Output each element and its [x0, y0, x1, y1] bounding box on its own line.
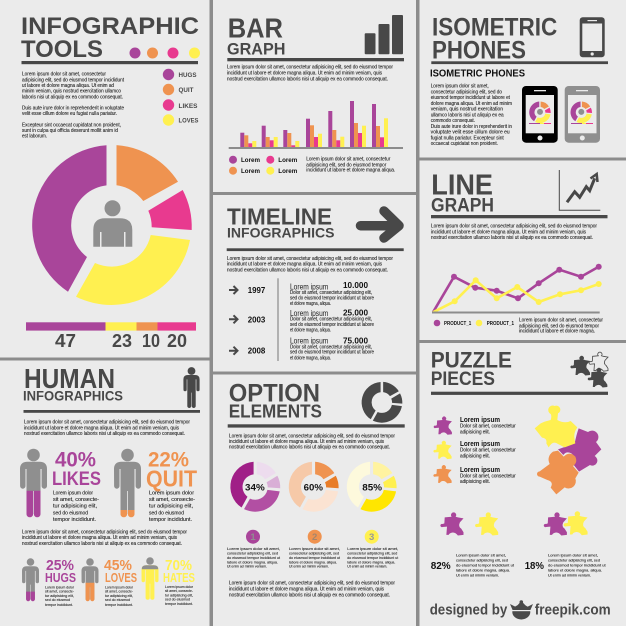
stat: 22% quit: [146, 449, 197, 492]
body text: fugiat nulla pariatur. Excepteur sint: [431, 135, 504, 141]
body text: [431, 224, 597, 241]
line chart legend: [434, 320, 514, 327]
stacked bar values: 20: [167, 331, 187, 351]
body text: Lorem ipsum dolor sit amet, consectetur adipisicing elit, sed do eiusmod tempor: [227, 65, 393, 71]
stat: 45% loves: [104, 557, 137, 585]
line chart: [432, 264, 602, 314]
panel: option elements: [227, 380, 405, 598]
text: loves: Lorem ipsum dolor: [105, 584, 134, 590]
footer: designed by freepik: [430, 600, 611, 620]
panel: isometric phones: [430, 14, 608, 147]
text: likes: tur adipisicing elit,: [53, 504, 97, 510]
text: loves: tempor incididunt.: [105, 602, 133, 607]
stat: 45% loves: 45%: [104, 557, 132, 574]
body text: Lorem ipsum dolor sit amet, consectetur adipisicing elit, sed do eiusmod tempor: [431, 224, 597, 230]
heading: option elements: [229, 380, 322, 422]
stat: 18%: do eiusmod tempor incididunt ut: [548, 563, 607, 568]
icon: phone: [580, 17, 605, 57]
body text: Lorem ipsum dolor sit amet,: [431, 84, 489, 90]
stat: 18%: 18%: [525, 561, 544, 572]
text: loves: [105, 584, 134, 607]
person: 45% loves: [81, 558, 99, 601]
body text: nostrud exercitation ullamco laboris nisi ut aliquip ex ea commodo consequat.: [227, 76, 388, 82]
timeline entry 2008: sed do eiusmod tempor incididunt ut labore: [290, 350, 374, 356]
text: hates: tempor incididunt.: [165, 601, 193, 606]
option 1: Lorem ipsum dolor sit amet,: [227, 546, 280, 551]
stat: 70% hates: HATES: [163, 570, 195, 585]
puzzle list item 2: Dolor sit amet, consectetur: [460, 448, 516, 454]
text: likes: sed do eiusmod: [53, 510, 88, 516]
timeline entry 1997: et dolore magna, aliqua.: [290, 301, 331, 307]
heading: bar graph: BAR: [228, 12, 283, 43]
legend text: incididunt ut labore et dolore magna aliqua.: [306, 168, 395, 174]
heading: line graph: GRAPH: [431, 196, 494, 217]
body text: ullamco laboris nisi ut aliquip ex ea: [431, 112, 504, 118]
puzzle pair 82%: [440, 512, 498, 536]
option 3: Lorem ipsum dolor sit amet,: [347, 546, 398, 551]
stat: 45% loves: LOVES: [105, 570, 137, 585]
body text: incididunt ut labore et dolore magna aliqua. Ut enim ad minim veniam, quis: [431, 229, 586, 235]
option 1: consectetur adipisicing elit, sed: [227, 550, 278, 556]
middle text: [22, 530, 187, 547]
option 2: [289, 530, 341, 569]
timeline entry 2008: 75.000: [343, 336, 368, 346]
body text: eiusmod tempor incididunt ut labore et: [431, 95, 511, 101]
stacked bar: [26, 322, 196, 331]
text: hugs: Lorem ipsum dolor: [45, 584, 75, 590]
person: 40% likes: [20, 449, 47, 517]
stat: 25% hugs: HUGS: [45, 570, 76, 585]
stat: 40% likes: 40%: [55, 449, 96, 472]
body text: incididunt ut labore et dolore magna aliqua. Ut enim ad minim veniam, quis: [227, 262, 382, 268]
option 1: Ut enim ad minim veniam.: [227, 564, 267, 569]
timeline entry 1997: sed do eiusmod tempor incididunt ut labore: [290, 295, 374, 301]
legend text: incididunt ut labore et dolore magna.: [519, 329, 595, 335]
heading: puzzle pieces: [431, 348, 512, 390]
body text: minim veniam, quis nostrud exercitation ullamco: [22, 89, 121, 95]
stat: 82%: [431, 553, 515, 577]
heading: option elements: OPTION: [229, 380, 320, 408]
stacked bar values: [55, 331, 187, 351]
option 3: 3: [369, 532, 374, 543]
heading: isometric phones: [432, 14, 557, 64]
text: hugs: [45, 584, 75, 607]
donut 85%: [347, 462, 397, 512]
footer: designed by freepik: designed by: [430, 601, 508, 618]
body text: veniam, quis nostrud exercitation: [431, 107, 503, 113]
puzzle pair 18%: [544, 511, 588, 536]
chart legend: Lorem: [278, 157, 298, 164]
option 3: Ut enim ad minim veniam.: [347, 564, 387, 569]
closing text: Lorem ipsum dolor sit amet, consectetur adipisicing elit, sed do eiusmod tempor: [229, 581, 395, 587]
person: 70% hates: [141, 557, 159, 600]
grey phone with chart: [565, 86, 600, 143]
panel: timeline infographics: [227, 203, 404, 361]
heading: isometric phones: ISOMETRIC: [432, 14, 557, 42]
option 1: labore et dolore magna. aliqua.: [227, 559, 278, 564]
body text: Lorem ipsum dolor sit amet, consectetur adipisicing elit, sed do eiusmod tempor: [227, 256, 393, 262]
stacked bar values: 23: [112, 331, 132, 351]
chart legend: Lorem: [278, 168, 298, 175]
timeline entry 2003: et dolore magna, aliqua.: [290, 328, 331, 334]
heading: line graph: [431, 169, 494, 217]
text: likes: Lorem ipsum dolor: [53, 490, 93, 496]
text: hugs: tur adipisicing elit,: [45, 593, 74, 598]
stat: 22% quit: QUIT: [146, 466, 197, 492]
middle text: incididunt ut labore et dolore magna aliqua. Ut enim ad minim veniam, quis: [22, 535, 177, 541]
timeline entry 2003: [290, 307, 374, 334]
stat: 25% hugs: [45, 557, 76, 585]
line chart legend: PRODUCT_1: [444, 321, 471, 327]
puzzle list item 1: [434, 415, 516, 435]
heading: human infographics: INFOGRAPHICS: [23, 388, 123, 404]
body text: sunt in culpa qui officia deserunt mollit anim id: [22, 128, 118, 134]
timeline entry 2008: et dolore magna, aliqua.: [290, 355, 331, 361]
stat: 18%: Ut enim ad minim veniam.: [548, 572, 591, 577]
text: hates: sit amet, consecte-: [165, 588, 194, 593]
heading: infographic tools: TOOLS: [21, 36, 103, 63]
body text: laboris nisi ut aliquip ex ea commodo consequat.: [22, 94, 123, 100]
heading: timeline: TIMELINE: [227, 203, 332, 229]
donut chart: [32, 145, 192, 305]
body text: [22, 72, 125, 140]
body text: Duis aute irure dolor in reprehenderit in voluptate: [22, 106, 124, 112]
option 2: 2: [312, 532, 317, 543]
puzzle list item 3: Dolor sit amet, consectetur: [460, 473, 516, 479]
stat: 18%: [525, 553, 607, 577]
body text: nostrud exercitation ullamco laboris nisi ut aliquip ex ea commodo consequat.: [431, 235, 593, 241]
option 3: [347, 530, 399, 569]
body text: [431, 84, 512, 147]
donut 60%: 60%: [304, 482, 324, 493]
stat: 82%: Lorem ipsum dolor sit amet,: [456, 553, 506, 558]
footer: designed by freepik: freepik.com: [535, 601, 611, 618]
text: quit: sit amet, consecte-: [149, 497, 195, 503]
bar chart: [229, 101, 403, 149]
icon: freepik logo: [510, 600, 533, 620]
text: hugs: sed do eiusmod: [45, 597, 70, 602]
body text: [227, 256, 393, 274]
text: hates: Lorem ipsum dolor: [165, 584, 194, 589]
heading: isometric phones: PHONES: [432, 36, 526, 64]
text: hates: [165, 584, 194, 606]
text: hates: sed do eiusmod: [165, 597, 190, 602]
stacked bar values: 10: [142, 331, 160, 351]
text: loves: sit amet, consecte-: [105, 588, 134, 594]
heading: infographic tools: INFOGRAPHIC: [21, 13, 199, 40]
black phone with chart: [522, 86, 558, 143]
text: quit: Lorem ipsum dolor: [149, 490, 194, 496]
puzzle list item 3: adipisicing elit.: [460, 479, 490, 485]
timeline entry 1997: 10.000: [343, 280, 368, 290]
legend text: [306, 157, 395, 174]
chart legend: Lorem: [241, 157, 260, 164]
body text: Excepteur sint occaecat cupidatat non proident,: [22, 122, 121, 128]
chart legend: Lorem: [241, 168, 260, 175]
heading: option elements: ELEMENTS: [229, 402, 322, 422]
heading: infographic tools: [21, 13, 199, 63]
legend text: Lorem ipsum dolor sit amet, consectetur: [306, 157, 391, 163]
stat: 18%: labore et dolore magna. aliqua.: [548, 568, 602, 573]
body text: adipisicing elit, sed do eiusmod tempor incididunt: [22, 77, 125, 83]
heading: bar graph: GRAPH: [227, 39, 286, 58]
option 3: do eiusmod tempor incididunt ut: [347, 555, 399, 560]
timeline entry 1997: Dolor sit amet, consectetur adipisicing elit,: [290, 290, 372, 296]
stat: 70% hates: 70%: [165, 557, 192, 574]
body text: velit esse cillum dolore eu fugiat nulla pariatur.: [22, 111, 117, 117]
body text: ut labore et dolore magna aliqua. Ut enim ad: [22, 83, 114, 89]
legend: HUGS: [178, 72, 197, 79]
person: 22% quit: [114, 449, 141, 517]
option 2: labore et dolore magna. aliqua.: [289, 559, 337, 564]
intro text: nostrud exercitation ullamco laboris nisi ut aliquip ex ea commodo consequat.: [229, 445, 390, 451]
text: hates: tur adipisicing elit,: [165, 592, 193, 597]
body text: Duis aute irure dolor in reprehenderit in: [431, 124, 512, 130]
timeline entry 2003: Dolor sit amet, consectetur adipisicing elit,: [290, 317, 372, 323]
option 1: do eiusmod tempor incididunt ut: [227, 555, 281, 560]
timeline entry 2008: Lorem ipsum: [290, 337, 329, 346]
icon: line chart: [559, 170, 600, 210]
stat: 70% hates: [163, 557, 195, 585]
text: quit: sed do eiusmod: [149, 510, 184, 516]
legend: LOVES: [178, 118, 199, 124]
body text: incididunt ut labore et dolore magna aliqua. Ut enim ad minim veniam, quis: [227, 70, 382, 76]
stat: 82%: consectetur adipisicing elit, sed: [456, 557, 508, 562]
body text: [227, 65, 393, 82]
puzzle list item 2: adipisicing elit.: [460, 453, 490, 459]
legend text: Lorem ipsum dolor sit amet, consectetur: [519, 318, 603, 324]
stat: 82%: 82%: [431, 561, 451, 572]
heading: line graph: LINE: [431, 169, 493, 201]
stat: 25% hugs: 25%: [46, 557, 74, 574]
chart legend: [229, 156, 298, 175]
timeline years: 2008: [248, 347, 266, 356]
stat: 40% likes: [52, 449, 101, 490]
timeline years: 2003: [248, 315, 266, 324]
timeline entry 2008: [290, 336, 374, 361]
option 3: consectetur adipisicing elit, sed: [347, 550, 397, 556]
option 2: Lorem ipsum dolor sit amet,: [289, 546, 340, 551]
intro text: [24, 420, 190, 437]
stat: 82%: do eiusmod tempor incididunt ut: [456, 563, 515, 568]
heading: bar graph: [227, 12, 286, 58]
body text: occaecat cupidatat non proident.: [431, 141, 498, 147]
heading: human infographics: HUMAN: [24, 363, 115, 394]
icon: person: [183, 367, 200, 408]
timeline entry 2008: Dolor sit amet, consectetur adipisicing elit,: [290, 344, 372, 350]
heading: puzzle pieces: PUZZLE: [431, 348, 512, 373]
stacked bar values: 47: [55, 331, 76, 351]
body text: dolore magna aliqua. Ut enim ad minim: [431, 101, 512, 107]
puzzle list item 3: Lorem ipsum: [460, 465, 500, 474]
puzzle list item 1: Dolor sit amet, consectetur: [460, 423, 516, 429]
puzzle list item 1: adipisicing elit.: [460, 429, 490, 435]
panel: puzzle pieces: [431, 348, 608, 577]
stat: 40% likes: LIKES: [52, 469, 101, 490]
panel: infographic tools: [21, 13, 200, 351]
subheading: ISOMETRIC PHONES: [430, 69, 525, 80]
line chart legend: PRODUCT_1: [487, 321, 514, 327]
body text: est laborum.: [22, 134, 47, 140]
stat: 22% quit: 22%: [148, 449, 189, 472]
icon: donut: [362, 382, 402, 423]
timeline entry 2003: 25.000: [343, 307, 368, 317]
timeline entry 1997: [290, 280, 374, 307]
option 2: consectetur adipisicing elit, sed: [289, 550, 339, 556]
option 2: Ut enim ad minim veniam.: [289, 564, 329, 569]
body text: voluptate velit esse cillum dolore eu: [431, 130, 510, 136]
text: quit: tur adipisicing elit,: [149, 504, 193, 510]
donut 85%: 85%: [362, 482, 383, 493]
puzzle list item 1: Lorem ipsum: [460, 415, 500, 424]
big puzzle: [535, 406, 601, 494]
body text: nostrud exercitation ullamco laboris nisi ut aliquip ex ea commodo consequat.: [227, 268, 388, 274]
option 1: [227, 530, 281, 569]
panel: bar graph: [227, 12, 404, 175]
heading: puzzle pieces: PIECES: [431, 368, 495, 390]
middle text: Lorem ipsum dolor sit amet, consectetur adipisicing elit, sed do eiusmod tempor: [22, 530, 187, 536]
stat: 82%: Ut enim ad minim veniam.: [456, 572, 499, 577]
legend text: [519, 318, 603, 335]
timeline entry 2003: Lorem ipsum: [290, 309, 329, 318]
legend text: adipisicing elit, sed do eiusmod tempor: [519, 323, 599, 329]
puzzle list item 2: Lorem ipsum: [460, 439, 500, 448]
stat: 18%: Lorem ipsum dolor sit amet,: [548, 553, 598, 558]
closing text: [229, 581, 395, 598]
legend: [163, 69, 199, 126]
panel: human infographics: [20, 363, 200, 607]
option 2: do eiusmod tempor incididunt ut: [289, 555, 341, 560]
text: loves: sed do eiusmod: [105, 597, 130, 602]
stat: 82%: labore et dolore magna. aliqua.: [456, 568, 510, 573]
puzzle list item 3: [433, 465, 516, 485]
intro text: Lorem ipsum dolor sit amet, consectetur adipisicing elit, sed do eiusmod tempor: [229, 434, 395, 440]
text: hugs: tempor incididunt.: [45, 602, 73, 607]
stat: 18%: consectetur adipisicing elit, sed: [548, 557, 600, 562]
icon: bars: [365, 15, 403, 54]
panel: line graph: [431, 169, 608, 335]
intro text: Lorem ipsum dolor sit amet, consectetur adipisicing elit, sed do eiusmod tempor: [24, 420, 190, 426]
donut 60%: [289, 462, 339, 512]
body text: commodo consequat.: [431, 118, 475, 124]
timeline arrows: [229, 286, 238, 355]
person: 25% hugs: [22, 558, 39, 601]
body text: consectetur adipisicing elit, sed do: [431, 89, 502, 95]
text: loves: tur adipisicing elit,: [105, 593, 133, 598]
text: quit: tempor incididunt.: [149, 517, 192, 523]
text: likes: [53, 490, 99, 523]
timeline entry 1997: Lorem ipsum: [290, 282, 329, 292]
intro text: [229, 434, 395, 451]
donut 34%: 34%: [245, 482, 265, 493]
donut 34%: [230, 462, 280, 512]
legend text: adipisicing elit, sed do eiusmod tempor: [306, 162, 387, 168]
text: quit: [149, 490, 195, 523]
icon: person in donut: [93, 200, 132, 247]
closing text: nostrud exercitation ullamco laboris nisi ut aliquip ex ea commodo consequat.: [229, 592, 390, 598]
closing text: incididunt ut labore et dolore magna aliqua. Ut enim ad minim veniam, quis: [229, 586, 384, 592]
timeline years: 1997: [248, 286, 266, 295]
option 1: 1: [250, 532, 256, 543]
timeline entry 2003: sed do eiusmod tempor incididunt ut labore: [290, 322, 374, 328]
intro text: incididunt ut labore et dolore magna aliqua. Ut enim ad minim veniam, quis: [24, 426, 179, 432]
intro text: nostrud exercitation ullamco laboris nisi ut aliquip ex ea commodo consequat.: [24, 431, 185, 437]
intro text: incididunt ut labore et dolore magna aliqua. Ut enim ad minim veniam, quis: [229, 439, 384, 445]
middle text: nostrud exercitation ullamco laboris nisi ut aliquip ex ea commodo consequat.: [22, 541, 182, 547]
text: likes: sit amet, consecte-: [53, 497, 99, 503]
text: likes: tempor incididunt.: [53, 517, 96, 523]
icon: big arrow: [360, 211, 399, 238]
text: hugs: sit amet, consecte-: [45, 588, 75, 594]
option 3: labore et dolore magna. aliqua.: [347, 559, 395, 564]
body text: Lorem ipsum dolor sit amet, consectetur: [22, 72, 106, 78]
colour dots: [130, 48, 200, 58]
legend: LIKES: [178, 103, 198, 110]
heading: timeline: INFOGRAPHICS: [227, 224, 334, 240]
timeline years: [248, 286, 266, 356]
icon: puzzle: [570, 352, 608, 388]
legend: QUIT: [178, 87, 194, 94]
puzzle list item 2: [433, 439, 516, 459]
